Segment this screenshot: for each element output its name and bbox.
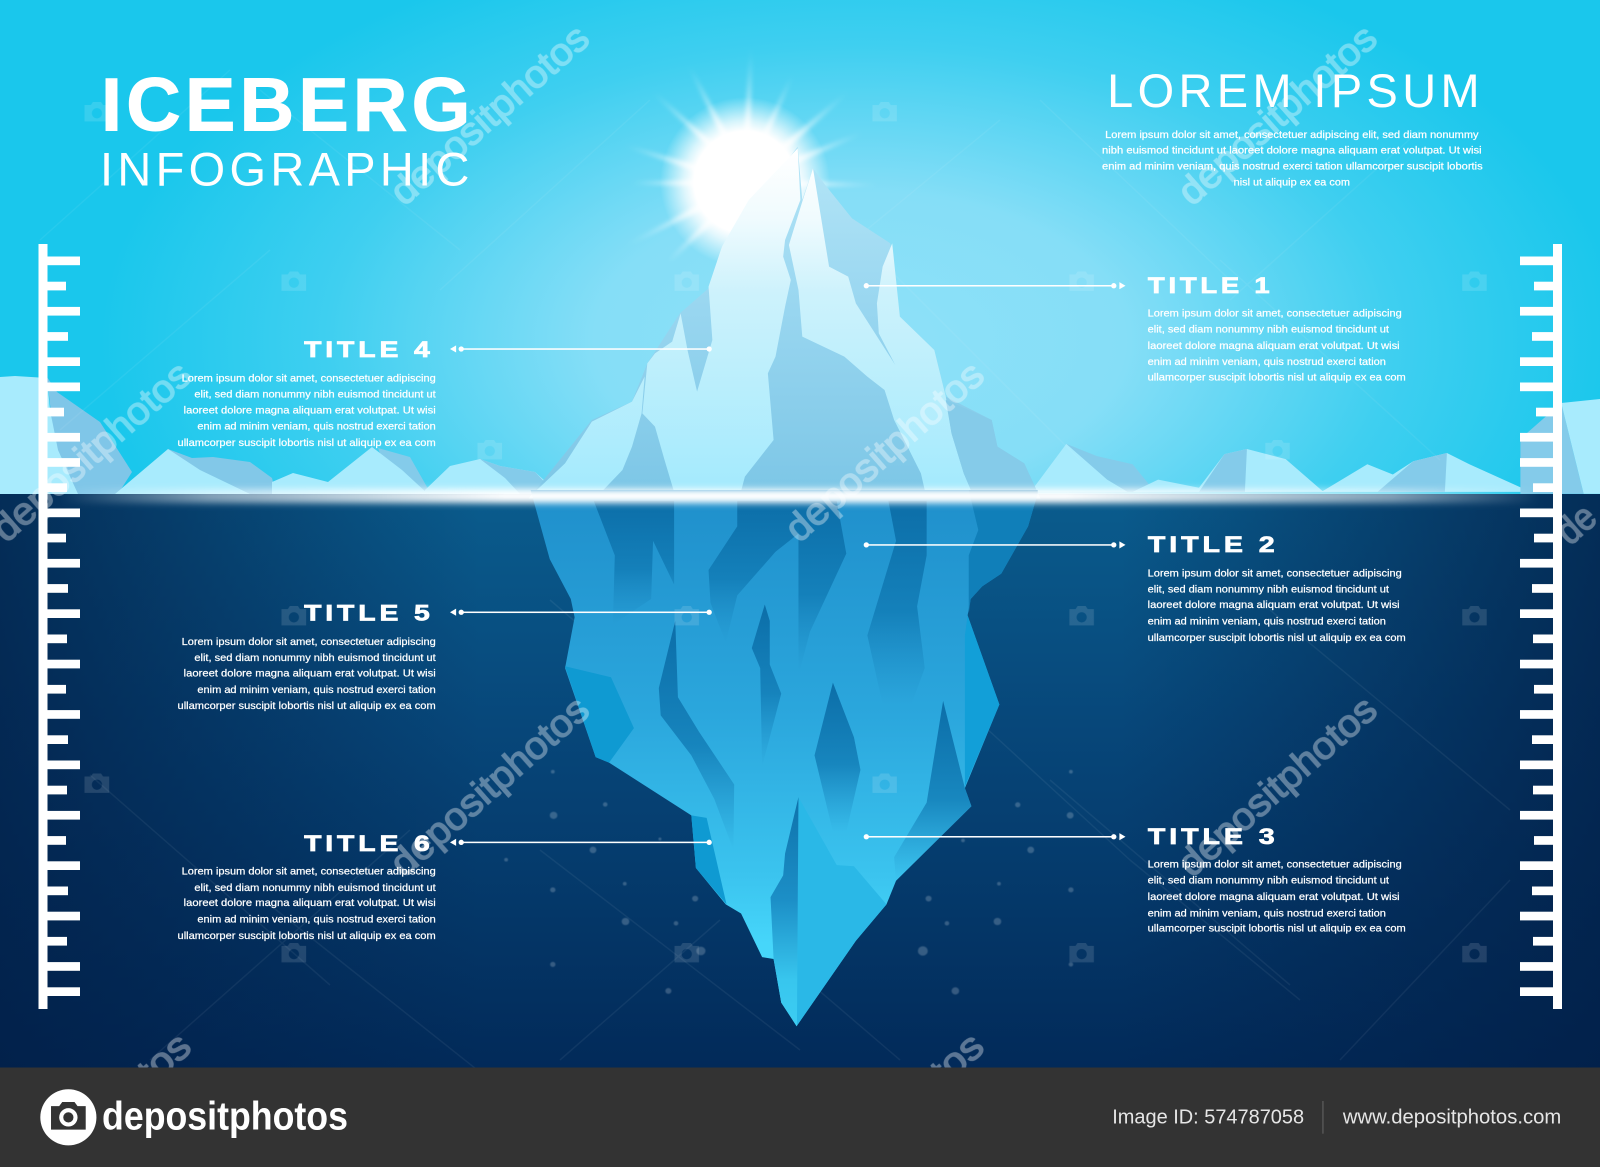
arrow: title 5 leader <box>450 609 712 616</box>
ruler: right <box>1520 244 1562 1009</box>
watermark: depositphotos text: tos <box>922 1024 992 1093</box>
callout: title 4: laoreet dolore magna aliquam erat volutpat. Ut wisi <box>184 405 436 416</box>
callout: title 2: laoreet dolore magna aliquam erat volutpat. Ut wisi <box>1148 600 1400 611</box>
iceberg below water <box>531 490 1038 1026</box>
callout: title 4: elit, sed diam nonummy nibh euismod tincidunt ut <box>194 389 436 400</box>
callout: title 2: elit, sed diam nonummy nibh euismod tincidunt ut <box>1148 584 1389 595</box>
facet: left lower <box>565 666 634 763</box>
facet: top dark centre <box>798 501 846 672</box>
watermark: depositphotos text: depositphotos <box>1169 16 1385 213</box>
watermark: depositphotos text: depositphotos <box>1169 688 1385 885</box>
panel: sky background <box>0 0 1600 494</box>
callout: title 6: elit, sed diam nonummy nibh euismod tincidunt ut <box>194 883 436 894</box>
ruler: left <box>38 244 80 1009</box>
heading and intro: Lorem Ipsum: nisl ut aliquip ex ea com <box>1234 178 1350 189</box>
heading and intro: Lorem Ipsum <box>1102 65 1483 189</box>
callout: title 3: laoreet dolore magna aliquam erat volutpat. Ut wisi <box>1148 892 1400 903</box>
iceberg facet: right shadow <box>946 400 1040 498</box>
facet: bottom keel left <box>771 797 798 1026</box>
facet: top dark centre left <box>709 501 798 643</box>
title <box>100 63 470 196</box>
facet: diamond crevasse <box>815 683 860 832</box>
watermark: camera icons <box>85 102 1487 962</box>
facet: right strip <box>965 615 999 786</box>
facet: bottom keel right <box>797 797 886 1026</box>
callout: title 2: TITLE 2 <box>1148 532 1279 557</box>
facet: long left crevasse <box>659 621 734 850</box>
distant icebergs: right <box>1031 399 1600 494</box>
arrow: title 3 leader <box>864 833 1126 840</box>
bubbles <box>504 770 1074 995</box>
arrow: title 4 leader <box>450 345 712 353</box>
facet: narrow centre crevasse <box>752 605 781 766</box>
callout: title 4: TITLE 4 <box>304 337 434 362</box>
title: ICEBERG <box>101 63 470 147</box>
callout: title 6: laoreet dolore magna aliquam erat volutpat. Ut wisi <box>184 898 436 909</box>
callout: title 1: ullamcorper suscipit lobortis nisl ut aliquip ex ea com <box>1148 373 1406 384</box>
callout: title 5: laoreet dolore magna aliquam erat volutpat. Ut wisi <box>184 669 436 680</box>
heading and intro: Lorem Ipsum: Lorem ipsum dolor sit amet, consectetuer adipiscing elit, sed diam nonummy <box>1105 130 1479 141</box>
callout: title 5 <box>178 600 436 712</box>
callout: title 2: enim ad minim veniam, quis nostrud exerci tation <box>1148 616 1386 627</box>
callout: title 1: Lorem ipsum dolor sit amet, consectetuer adipiscing <box>1148 308 1402 319</box>
callout: title 2: ullamcorper suscipit lobortis nisl ut aliquip ex ea com <box>1148 633 1406 644</box>
callout: title 5: enim ad minim veniam, quis nostrud exerci tation <box>197 685 436 696</box>
facet: right crevasse <box>894 701 971 881</box>
watermark: depositphotos text: tos <box>129 1024 199 1093</box>
callout: title 4 <box>178 337 436 449</box>
footer url: www.depositphotos.com <box>1342 1106 1561 1128</box>
footer logo icon <box>40 1089 96 1145</box>
callout: title 3: ullamcorper suscipit lobortis nisl ut aliquip ex ea com <box>1148 924 1406 935</box>
callout: title 1: enim ad minim veniam, quis nostrud exerci tation <box>1148 357 1386 368</box>
heading and intro: Lorem Ipsum: LOREM IPSUM <box>1107 65 1480 117</box>
watermark: depositphotos text: depositphotos <box>382 688 597 885</box>
callout: title 4: enim ad minim veniam, quis nostrud exerci tation <box>197 422 436 433</box>
title: INFOGRAPHIC <box>100 144 469 196</box>
callout: title 6: TITLE 6 <box>304 831 434 856</box>
callout: title 5: Lorem ipsum dolor sit amet, consectetuer adipiscing <box>182 637 436 648</box>
facet: top dark left <box>594 501 674 625</box>
footer bar <box>0 1067 1600 1167</box>
callout: title 5: elit, sed diam nonummy nibh euismod tincidunt ut <box>194 653 436 664</box>
callout: title 3: enim ad minim veniam, quis nostrud exerci tation <box>1148 908 1386 919</box>
callout: title 3: Lorem ipsum dolor sit amet, consectetuer adipiscing <box>1148 859 1402 870</box>
callout: title 4: Lorem ipsum dolor sit amet, consectetuer adipiscing <box>182 374 436 385</box>
callout: title 6: enim ad minim veniam, quis nostrud exerci tation <box>197 914 436 925</box>
callout: title 5: ullamcorper suscipit lobortis nisl ut aliquip ex ea com <box>178 701 436 712</box>
footer logo text: depositphotos <box>102 1095 348 1139</box>
callout: title 4: ullamcorper suscipit lobortis nisl ut aliquip ex ea com <box>178 438 436 449</box>
heading and intro: Lorem Ipsum: nibh euismod tincidunt ut laoreet dolore magna aliquam erat volutpat. Ut wisi <box>1102 146 1482 157</box>
callout: title 3 <box>1148 824 1406 935</box>
arrow: title 1 leader <box>864 282 1126 289</box>
callout: title 6 <box>178 831 436 942</box>
callout: title 6: Lorem ipsum dolor sit amet, consectetuer adipiscing <box>182 866 436 877</box>
callout: title 1: TITLE 1 <box>1148 273 1273 298</box>
facet: top right dark <box>969 490 1038 614</box>
facet: bottom left <box>691 815 727 904</box>
watermark: depositphotos text: depositphotos <box>382 16 597 213</box>
callout: title 3: TITLE 3 <box>1148 824 1279 849</box>
iceberg above water <box>529 147 1040 498</box>
icon: sun with rays <box>626 48 880 267</box>
iceberg facet: left slope <box>530 377 645 498</box>
waterline glow <box>60 489 1540 503</box>
heading and intro: Lorem Ipsum: enim ad minim veniam, quis nostrud exerci tation ullamcorper suscipit lobortis <box>1102 161 1483 172</box>
callout: title 1: elit, sed diam nonummy nibh euismod tincidunt ut <box>1148 325 1389 336</box>
iceberg facet: right ridge <box>789 168 974 498</box>
arrow: title 2 leader <box>864 541 1126 548</box>
callout: title 5: TITLE 5 <box>304 600 434 625</box>
watermark: depositphotos text: depositphotos <box>777 353 992 550</box>
callout: title 2: Lorem ipsum dolor sit amet, consectetuer adipiscing <box>1148 569 1402 580</box>
callout: title 1: laoreet dolore magna aliquam erat volutpat. Ut wisi <box>1148 341 1400 352</box>
facet: top dark right <box>867 501 927 704</box>
distant icebergs: left <box>0 376 556 494</box>
iceberg facet: central peak <box>642 148 800 498</box>
footer image id: Image ID: 574787058 <box>1112 1106 1304 1128</box>
callout: title 2 <box>1148 532 1406 644</box>
arrow: title 6 leader <box>450 839 712 846</box>
callout: title 6: ullamcorper suscipit lobortis nisl ut aliquip ex ea com <box>178 931 436 942</box>
callout: title 3: elit, sed diam nonummy nibh euismod tincidunt ut <box>1148 876 1389 887</box>
callout: title 1 <box>1148 273 1406 384</box>
